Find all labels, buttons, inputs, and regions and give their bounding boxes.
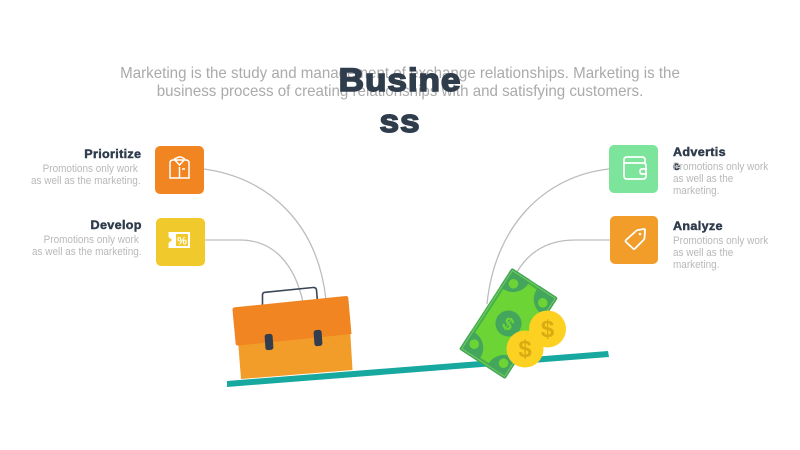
scene illustration xyxy=(204,168,610,387)
text: Develop description: as well as the marketing. xyxy=(32,246,142,258)
heading: Advertis / e xyxy=(673,145,726,173)
text: Analyze description: Promotions only work xyxy=(673,235,768,247)
icon: wallet xyxy=(609,145,658,193)
heading: Advertis / e: Advertis xyxy=(673,145,726,159)
text: Advertise description: marketing. xyxy=(672,185,719,197)
heading: Develop: Develop xyxy=(91,218,142,232)
text: Develop description: Promotions only work xyxy=(44,234,139,246)
heading: Prioritize: Prioritize xyxy=(84,147,141,161)
title: ss xyxy=(380,103,420,139)
title: Busine xyxy=(339,62,461,98)
icon: discount ticket: % xyxy=(177,236,187,248)
text: Analyze description: as well as the xyxy=(673,247,733,259)
heading: Advertis / e: e xyxy=(673,159,680,173)
seesaw beam xyxy=(227,351,609,387)
text: Prioritize description xyxy=(31,163,141,187)
panel: Analyze xyxy=(610,216,768,271)
icon: banknote with coins xyxy=(460,268,566,378)
text: Analyze description xyxy=(673,235,768,271)
icon: briefcase xyxy=(232,287,352,379)
text: Prioritize description: Promotions only work xyxy=(43,163,138,175)
description text: Marketing is the study and management of exchange relationships. Marketing is the xyxy=(120,65,680,82)
panel: Develop xyxy=(32,218,205,266)
icon: banknote with coins: $ xyxy=(541,316,555,343)
icon: shirt box xyxy=(155,146,204,194)
text: Advertise description: as well as the xyxy=(672,173,733,185)
icon: price tag xyxy=(610,216,658,264)
icon: banknote with coins: $ xyxy=(499,313,518,335)
panel: Advertise xyxy=(609,145,768,197)
title xyxy=(339,62,461,139)
text: Analyze description: marketing. xyxy=(673,259,720,271)
text: Prioritize description: as well as the marketing. xyxy=(31,175,141,187)
icon: discount ticket xyxy=(156,218,205,266)
description text xyxy=(120,65,680,100)
text: Advertise description: Promotions only work xyxy=(672,161,768,173)
icon: banknote with coins: $ xyxy=(518,336,532,363)
panel: Prioritize xyxy=(31,146,204,194)
heading: Analyze: Analyze xyxy=(673,219,723,233)
text: Advertise description xyxy=(672,161,768,197)
description text: business process of creating relationships with and satisfying customers. xyxy=(157,83,643,100)
connector lines xyxy=(204,169,610,304)
text: Develop description xyxy=(32,234,142,258)
